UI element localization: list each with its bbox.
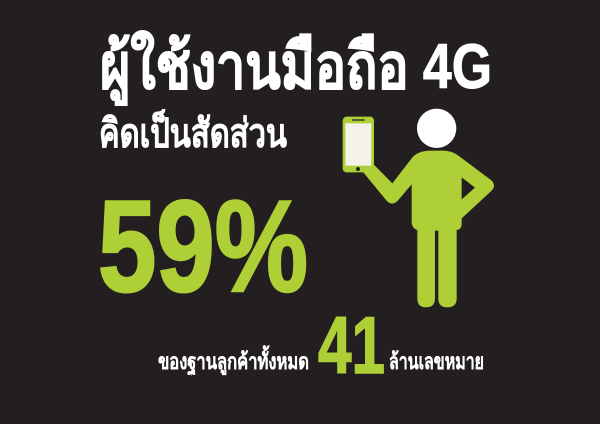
number 41: 41 <box>318 301 385 391</box>
person head <box>417 109 456 148</box>
subtitle: คิดเป็นสัดส่วน <box>99 108 287 156</box>
person body <box>363 151 494 307</box>
icon: person holding phone <box>343 109 494 307</box>
phone screen <box>345 123 371 166</box>
caption left: ของฐานลูกค้าทั้งหมด <box>158 345 309 376</box>
title: ผู้ใช้งานมือถือ 4G <box>100 30 492 106</box>
caption right: ล้านเลขหมาย <box>389 349 484 374</box>
phone button <box>356 167 360 171</box>
phone speaker <box>352 119 365 121</box>
phone body <box>343 117 374 172</box>
big percentage: 59% <box>98 173 308 319</box>
